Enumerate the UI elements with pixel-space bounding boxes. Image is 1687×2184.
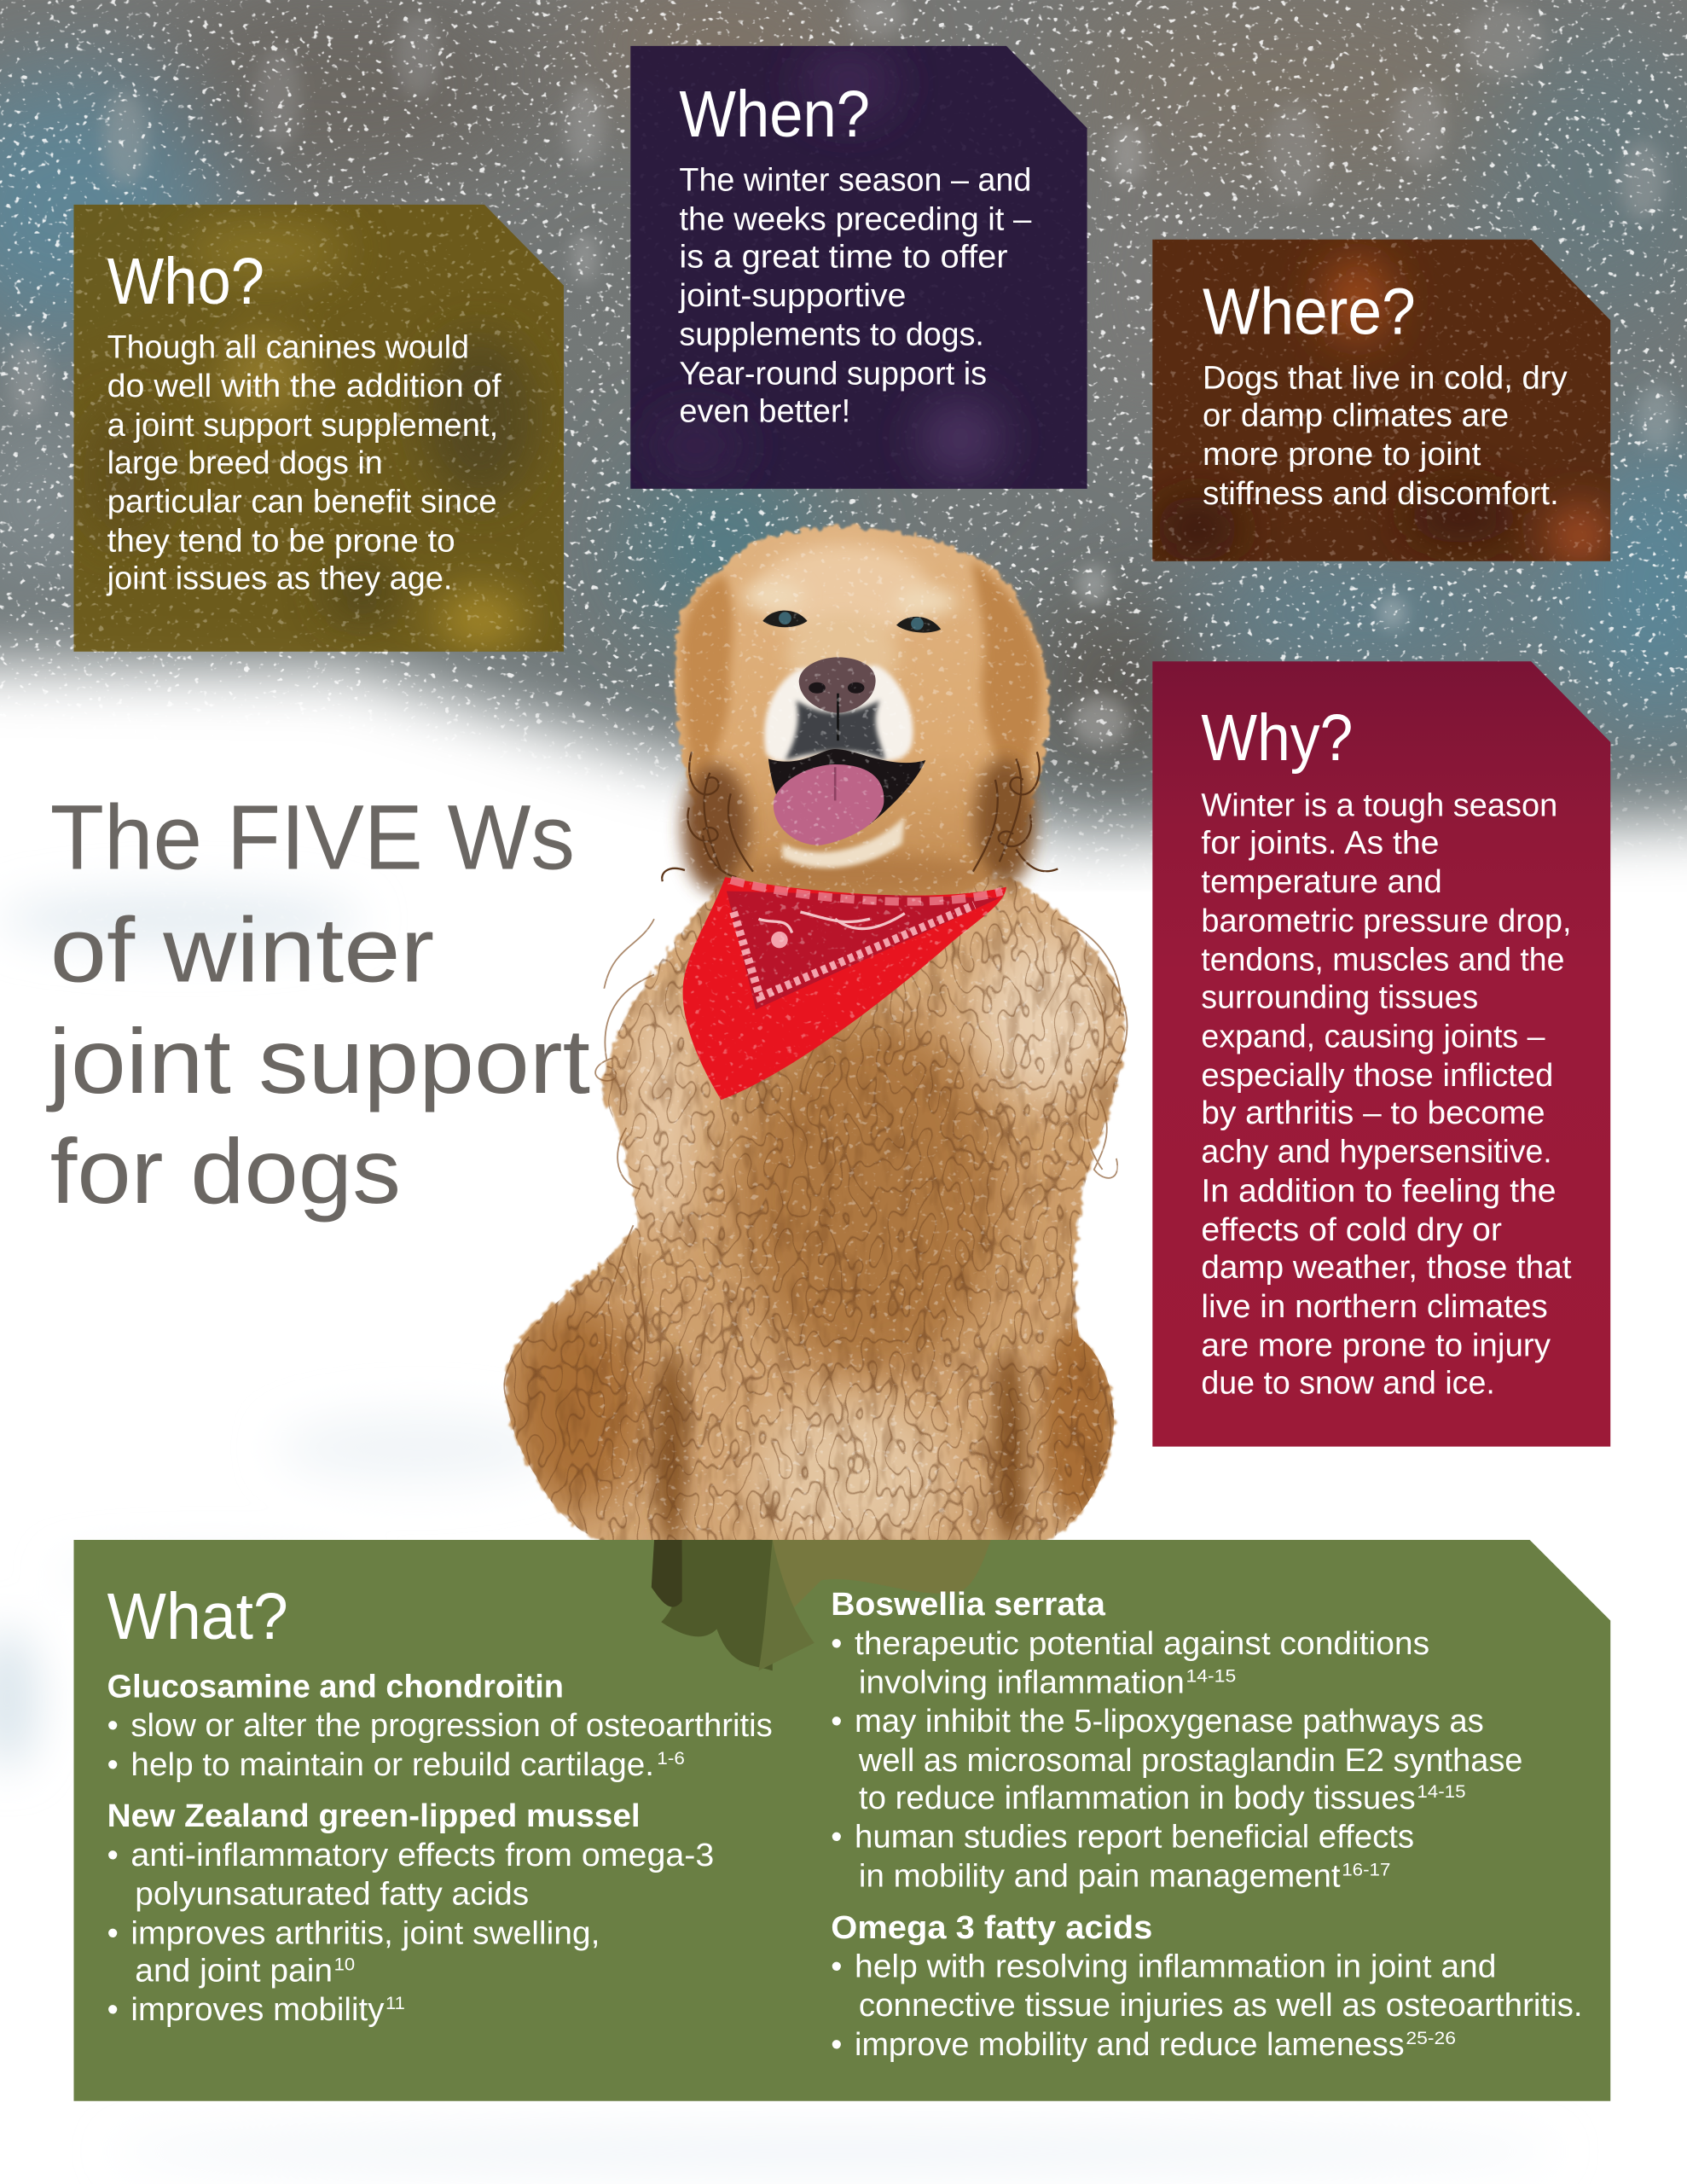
text block: why [1201,787,1572,1401]
heading: where: Where? [1203,276,1416,349]
column: left ingredients: improves mobility [130,1991,385,2027]
text block: when: is a great time to offer [679,238,1008,274]
column: right ingredients: help with resolving inflammation in joint and [855,1948,1496,1984]
column: left ingredients: 1-6 [657,1749,685,1769]
text block: who: large breed dogs in [107,444,383,480]
column: left ingredients: slow or alter the progression of osteoarthritis [130,1707,773,1743]
column: left ingredients: 10 [334,1955,355,1974]
text block: who: joint issues as they age. [107,560,452,595]
column: left ingredients: • [107,1707,119,1743]
dog neck curls [662,752,1058,881]
title [46,785,590,1223]
text block: why: due to snow and ice. [1201,1365,1495,1401]
text block: why: surrounding tissues [1201,979,1478,1015]
text block: why: achy and hypersensitive. [1201,1134,1552,1170]
column: left ingredients: • [107,1991,119,2027]
column: right ingredients: improve mobility and reduce lameness [855,2026,1405,2062]
text block: when: supplements to dogs. [679,317,984,352]
column: right ingredients: may inhibit the 5-lipoxygenase pathways as [855,1703,1484,1739]
column: right ingredients: • [831,2026,842,2062]
column: right ingredients: 25-26 [1406,2029,1456,2048]
column: left ingredients: anti-inflammatory effects from omega-3 [130,1837,714,1873]
title: of winter [50,898,434,1002]
text block: why: by arthritis – to become [1201,1095,1545,1130]
panel: where [1152,240,1610,564]
bandana [683,877,1006,1100]
text block: when: joint-supportive [678,277,906,313]
column: left ingredients: and joint pain [135,1952,333,1988]
text block: why: tendons, muscles and the [1201,942,1564,978]
dog ears [681,560,1041,894]
column: right ingredients: • [831,1948,842,1984]
text block: why: especially those inflicted [1201,1057,1553,1093]
heading: why: Why? [1201,702,1353,775]
text block: why: effects of cold dry or [1201,1211,1502,1247]
column: right ingredients: connective tissue injuries as well as osteoarthritis. [859,1987,1583,2023]
column: right ingredients: 14-15 [1417,1782,1466,1802]
dog eyes [762,611,941,633]
text block: when: Year-round support is [679,355,987,391]
column: left ingredients: • [107,1746,119,1782]
dog mouth and tongue [768,749,925,868]
bandana paisley panel [727,880,1002,1009]
snowfall speckle [0,0,1687,853]
column: right ingredients: therapeutic potential against conditions [855,1625,1429,1661]
text block: why: damp weather, those that [1201,1249,1572,1285]
column: left ingredients: • [107,1914,119,1950]
title: joint support [46,1009,590,1112]
panel: why [1152,661,1610,1447]
column: right ingredients: in mobility and pain management [859,1857,1341,1893]
text block: who: Though all canines would [107,328,469,364]
text block: where: stiffness and discomfort. [1203,475,1559,511]
dog nose [799,657,876,741]
text block: why: live in northern climates [1201,1288,1548,1324]
text block: when: even better! [679,393,850,429]
column: right ingredients: to reduce inflammation in body tissues [859,1780,1416,1815]
dog body and legs [487,863,1141,1560]
column: left ingredients: Glucosamine and chondroitin [107,1668,564,1704]
title: for dogs [50,1119,401,1223]
text block: why: In addition to feeling the [1201,1172,1557,1208]
column: right ingredients: 16-17 [1342,1860,1390,1879]
text block: why: expand, causing joints – [1201,1018,1545,1054]
column: left ingredients: polyunsaturated fatty acids [135,1876,529,1912]
title: The FIVE Ws [50,785,575,888]
column: left ingredients: 11 [386,1994,405,2013]
text block: when: The winter season – and [679,162,1031,198]
snow ground fade [0,661,1687,1114]
speckle over dog [599,543,1128,1531]
column: left ingredients [107,1668,773,2027]
column: left ingredients: improves arthritis, joint swelling, [130,1914,600,1950]
column: right ingredients [831,1586,1583,2062]
text block: where: more prone to joint [1203,436,1481,472]
column: right ingredients: involving inflammation [859,1664,1185,1700]
text block: when [678,162,1031,429]
column: right ingredients: 14-15 [1186,1666,1236,1686]
text block: when: the weeks preceding it – [679,200,1031,236]
column: right ingredients: Omega 3 fatty acids [831,1909,1152,1945]
heading: what: What? [107,1581,288,1653]
dog fur curls [504,919,1128,1476]
text block: why: are more prone to injury [1201,1327,1551,1363]
column: right ingredients: • [831,1625,842,1661]
text block: who: particular can benefit since [107,484,497,520]
column: right ingredients: well as microsomal prostaglandin E2 synthase [858,1742,1522,1778]
column: right ingredients: Boswellia serrata [831,1586,1106,1622]
column: left ingredients: help to maintain or rebuild cartilage. [130,1746,654,1782]
text block: who: do well with the addition of [107,368,501,404]
dog legs through panel [652,1540,991,1670]
dog face markings [743,544,956,762]
text block: who: they tend to be prone to [107,522,455,558]
heading: when: When? [679,78,870,151]
text block: where: or damp climates are [1203,397,1509,433]
text block: why: barometric pressure drop, [1201,903,1572,938]
column: left ingredients: • [107,1837,119,1873]
text block: why: for joints. As the [1201,824,1440,860]
column: right ingredients: • [831,1819,842,1855]
panel: who [73,205,564,652]
text block: who [107,328,501,595]
column: left ingredients: New Zealand green-lipped mussel [107,1798,641,1833]
heading: who: Who? [107,246,264,318]
column: right ingredients: • [831,1703,842,1739]
panel: when [630,46,1087,489]
dog head [662,527,1058,898]
text block: where: Dogs that live in cold, dry [1203,359,1568,395]
dog photo [487,527,1141,1560]
column: right ingredients: human studies report beneficial effects [855,1819,1414,1855]
text block: why: temperature and [1201,863,1442,899]
text block: why: Winter is a tough season [1201,787,1557,822]
text block: where [1203,359,1568,511]
panel: what [73,1540,1610,2101]
text block: who: a joint support supplement, [107,407,498,443]
